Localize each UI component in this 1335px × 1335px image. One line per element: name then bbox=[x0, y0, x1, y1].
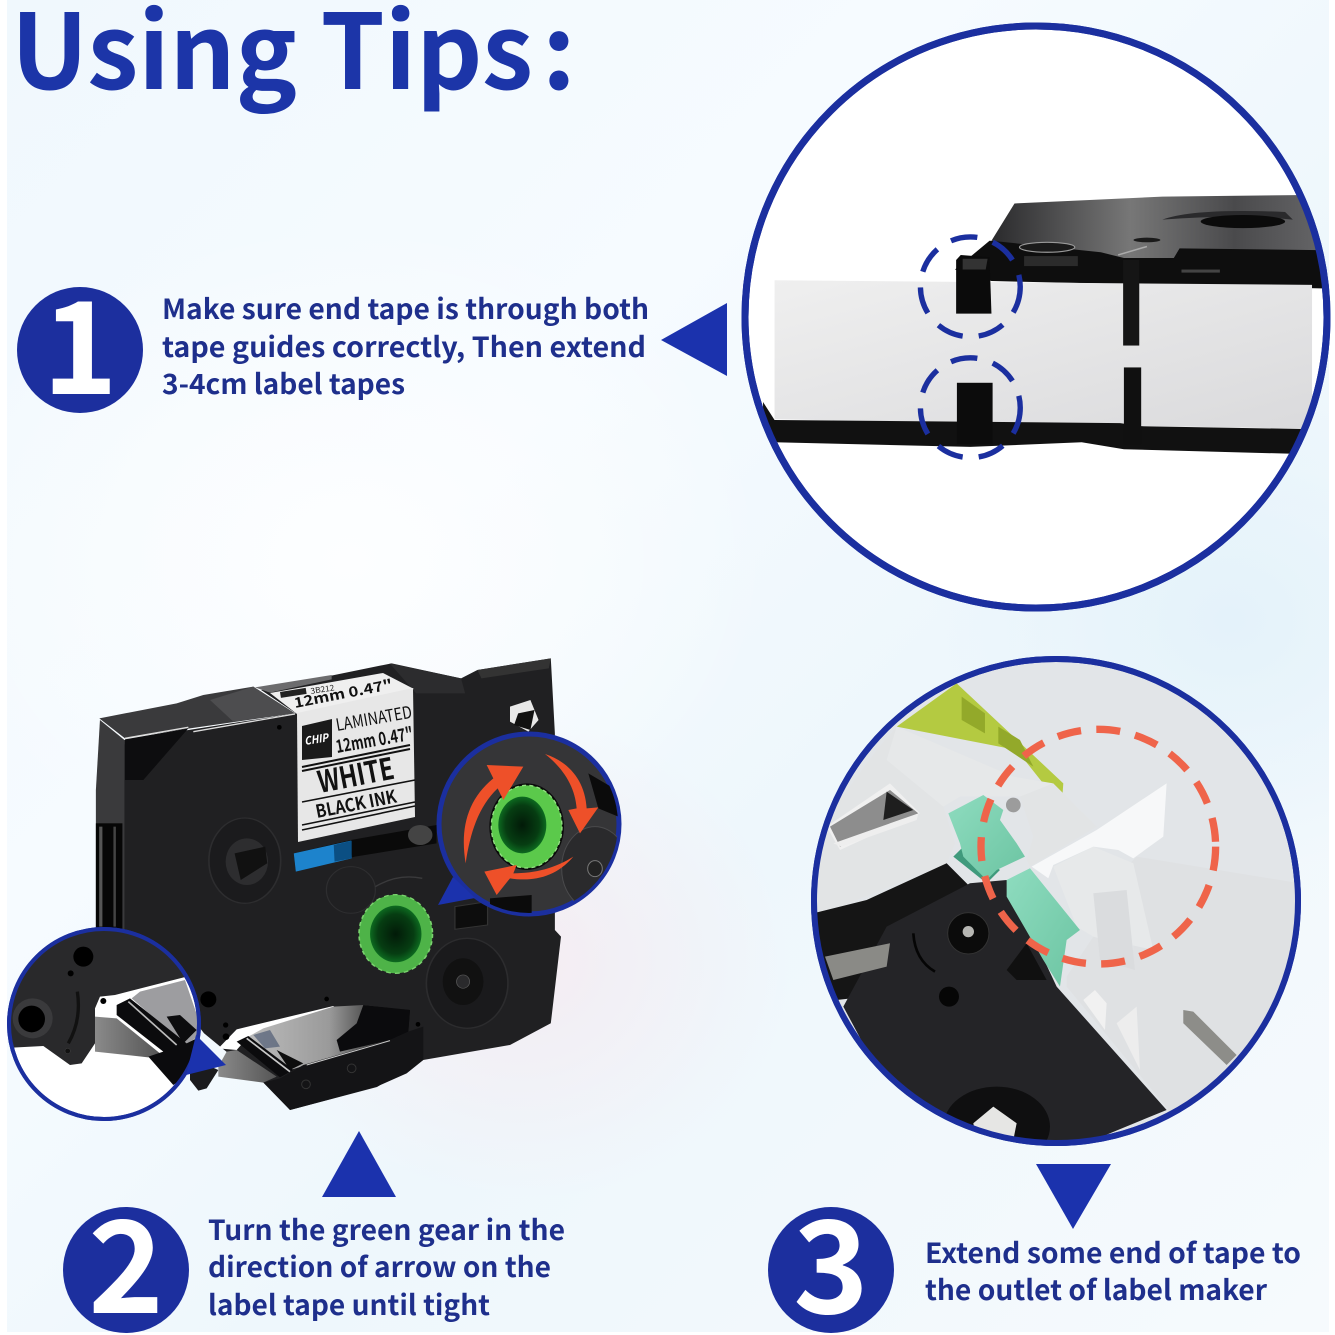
tape guides bbox=[956, 255, 991, 314]
badge: number 3 bbox=[768, 1165, 894, 1335]
label band: 3B212 bbox=[310, 682, 336, 697]
arrow: step 1 pointer bbox=[661, 303, 727, 376]
arrow: step 2 pointer bbox=[322, 1131, 396, 1197]
text: step 2 bbox=[208, 1209, 565, 1324]
side bbox=[96, 720, 126, 930]
dashed guide rings bbox=[920, 237, 1020, 337]
right housing bbox=[1170, 882, 1295, 1112]
label tape bbox=[775, 280, 1312, 429]
text: step 2: label tape until tight bbox=[208, 1284, 490, 1324]
label band: CHIP bbox=[303, 729, 331, 749]
pointer triangle bbox=[186, 1035, 226, 1075]
text: step 2: Turn the green gear in the bbox=[208, 1209, 565, 1249]
text: step 1 bbox=[162, 288, 649, 403]
cartridge top bbox=[955, 241, 1335, 289]
inset: tape exit bbox=[0, 920, 226, 1119]
tape exit and jaw bbox=[190, 991, 423, 1110]
tape window bbox=[294, 825, 437, 872]
panel: step 1 close-up circle bbox=[745, 26, 1335, 608]
label band bbox=[270, 673, 415, 842]
green gear inset bbox=[489, 783, 564, 870]
arrow: step 3 pointer bbox=[1036, 1164, 1111, 1229]
lower hub bbox=[426, 938, 508, 1028]
badge: number 2 bbox=[63, 1165, 189, 1335]
label band: 12mm 0.47" bbox=[334, 720, 415, 759]
text: step 2: direction of arrow on the bbox=[208, 1246, 551, 1286]
cartridge black bbox=[843, 880, 1167, 1157]
red dashed ring bbox=[981, 729, 1216, 964]
rotation arrows bbox=[464, 765, 523, 863]
top-right notch bbox=[477, 658, 551, 678]
hub and pin bbox=[948, 913, 989, 954]
label band: BLACK INK bbox=[313, 783, 399, 824]
text: step 1: tape guides correctly, Then extend bbox=[162, 326, 646, 366]
body bbox=[124, 658, 561, 1110]
text: step 1: Make sure end tape is through both bbox=[162, 288, 649, 328]
text: step 3 bbox=[925, 1232, 1301, 1309]
label band: WHITE bbox=[313, 744, 397, 802]
badge: number 1: 1 bbox=[42, 246, 118, 431]
black tape band bbox=[763, 402, 1316, 454]
spool hub bbox=[209, 818, 281, 903]
label tape bbox=[1032, 783, 1167, 878]
green gear bbox=[359, 895, 432, 973]
label band: LAMINATED bbox=[334, 698, 414, 736]
panel: tape cartridge bbox=[96, 658, 561, 1110]
lid bbox=[99, 675, 332, 780]
label band: 12mm 0.47" bbox=[292, 674, 394, 713]
dark interior bbox=[813, 863, 973, 1000]
text: step 3: the outlet of label maker bbox=[925, 1269, 1268, 1309]
right strip bbox=[390, 663, 465, 693]
text: step 3: Extend some end of tape to bbox=[925, 1232, 1301, 1272]
mint release levers bbox=[953, 848, 1000, 880]
lower window bbox=[455, 902, 488, 929]
badge: number 1 bbox=[17, 246, 143, 431]
text: step 1: 3-4cm label tapes bbox=[162, 363, 405, 403]
pointer triangle bbox=[438, 877, 475, 905]
faint ring bbox=[326, 867, 375, 913]
inset: gear rotation bbox=[438, 734, 628, 917]
panel: step 3 label maker close-up bbox=[810, 659, 1300, 1167]
